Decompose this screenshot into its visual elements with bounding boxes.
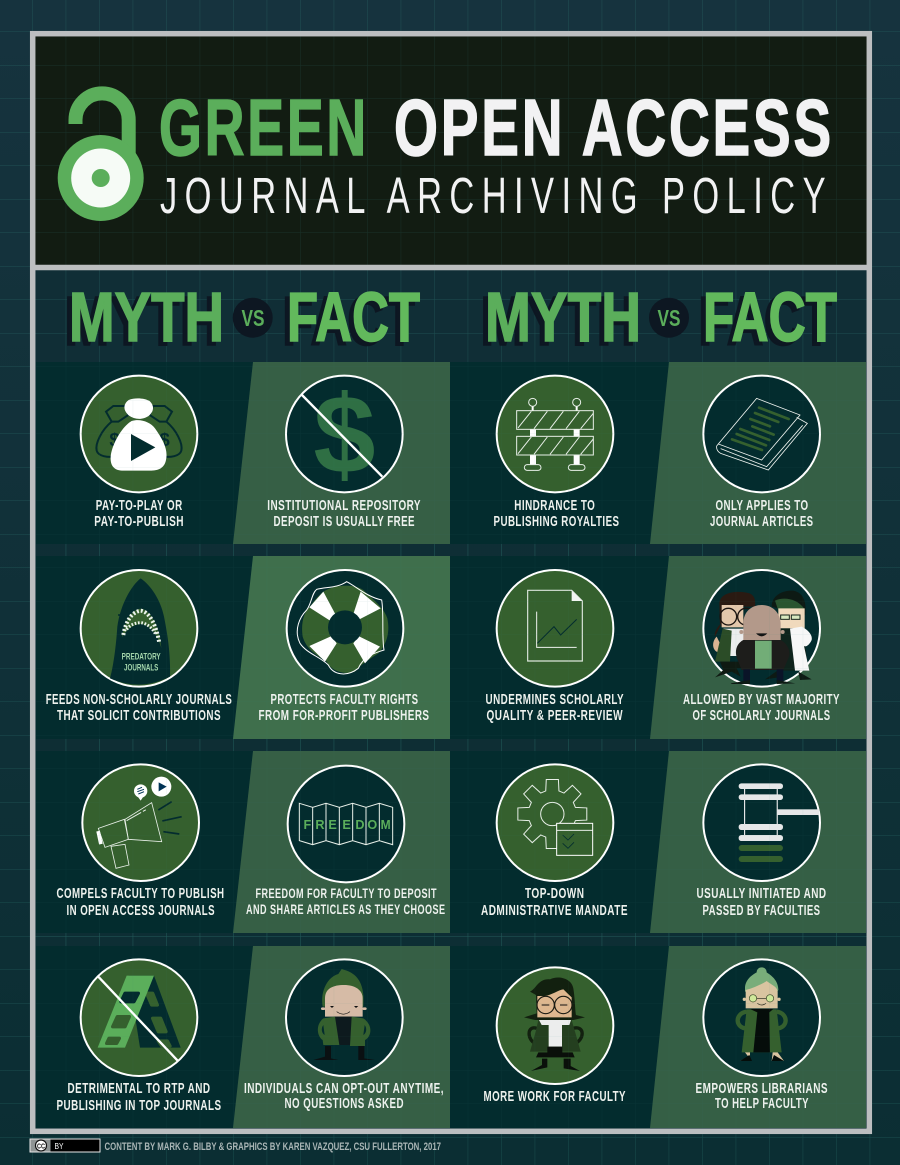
icon: shark predatory journals xyxy=(81,570,197,687)
caption: initiated by faculties: USUALLY INITIATED AND xyxy=(696,885,826,902)
icon: freedom folded map: M xyxy=(381,818,391,832)
header panel xyxy=(33,34,869,267)
caption: top-down mandate: ADMINISTRATIVE MANDATE xyxy=(481,902,628,919)
icon: document with chart xyxy=(497,570,613,687)
lower content background xyxy=(33,268,869,1131)
caption: undermines quality: UNDERMINES SCHOLARLY xyxy=(486,691,624,708)
panel: fact freedom xyxy=(233,751,450,933)
faint grid over panels xyxy=(36,362,866,1128)
panel: fact empowers librarians xyxy=(650,946,866,1128)
icon: freedom folded map: F xyxy=(303,818,311,832)
icon: road barricade xyxy=(497,376,613,492)
caption: compels faculty xyxy=(56,885,224,919)
panel: myth top-down mandate xyxy=(450,751,669,933)
right man xyxy=(765,591,812,680)
icon: freedom folded map xyxy=(288,766,404,882)
icon: gavel xyxy=(703,764,820,881)
heading: myth vs fact right xyxy=(480,278,837,360)
caption: protects rights xyxy=(258,691,430,724)
panel: fact repository free xyxy=(233,362,450,544)
caption: opt-out xyxy=(244,1080,444,1112)
caption: undermines quality: QUALITY & PEER-REVIEW xyxy=(486,707,623,724)
centre bald man xyxy=(731,605,795,684)
icon: gear and checklist window xyxy=(497,764,613,881)
footer: creative commons badge: CC xyxy=(37,1144,45,1150)
heading: myth vs fact right: MYTH xyxy=(485,278,641,356)
caption: pay-to-play: PAY-TO-PUBLISH xyxy=(94,513,184,530)
icon: crossed out ladder xyxy=(81,959,197,1076)
caption: pay-to-play: PAY-TO-PLAY OR xyxy=(96,497,183,514)
panel: fact journal articles xyxy=(650,362,866,544)
caption: journal articles: ONLY APPLIES TO xyxy=(716,497,808,514)
footer: creative commons badge: BY xyxy=(54,1142,64,1151)
caption: empowers librarians: TO HELP FACULTY xyxy=(715,1095,809,1112)
caption: pay-to-play xyxy=(94,497,184,530)
icon: journal book xyxy=(703,376,820,492)
caption: repository free: INSTITUTIONAL REPOSITORY xyxy=(267,497,421,514)
panel: myth detrimental to RTP xyxy=(36,946,253,1128)
caption: initiated by faculties: PASSED BY FACULTIES xyxy=(702,902,820,919)
icon: freedom folded map: E xyxy=(342,818,351,832)
caption: predatory journals xyxy=(46,691,232,724)
panel: myth predatory journals xyxy=(36,556,253,739)
footer: creative commons badge xyxy=(30,1139,100,1152)
caption: undermines quality xyxy=(486,691,624,724)
title: green open access: GREEN xyxy=(159,83,369,172)
heading: myth vs fact left: MYTH xyxy=(69,278,224,356)
heading: myth vs fact right: MYTH xyxy=(480,282,636,360)
panel: myth more work xyxy=(450,946,669,1128)
icon: woman with round glasses xyxy=(497,967,613,1084)
caption: detrimental to RTP: DETRIMENTAL TO RTP AND xyxy=(68,1080,210,1097)
caption: hindrance: HINDRANCE TO xyxy=(514,497,595,514)
heading: myth vs fact left: FACT xyxy=(282,282,415,360)
icon: crossed out dollar xyxy=(286,372,403,497)
caption: journal articles: JOURNAL ARTICLES xyxy=(710,513,814,530)
icon: megaphone xyxy=(82,764,199,881)
caption: compels faculty: COMPELS FACULTY TO PUBLISH xyxy=(56,885,224,902)
heading: myth vs fact right: FACT xyxy=(698,282,832,360)
caption: protects rights: FROM FOR-PROFIT PUBLISHERS xyxy=(258,707,430,724)
icon: money bags with play button: $ xyxy=(159,429,170,450)
caption: top-down mandate xyxy=(481,885,628,919)
heading: myth vs fact left: FACT xyxy=(287,278,420,356)
caption: top-down mandate: TOP-DOWN xyxy=(525,885,584,902)
icon: shark predatory journals: JOURNALS xyxy=(124,663,158,673)
caption: repository free: DEPOSIT IS USUALLY FREE xyxy=(274,513,415,530)
panel: fact protects rights xyxy=(233,556,450,739)
icon: money bags with play button: $ xyxy=(109,429,120,450)
panel: myth undermines quality xyxy=(450,556,669,739)
icon: crossed out dollar: $ xyxy=(313,372,375,497)
heading: myth vs fact left: MYTH xyxy=(64,282,219,360)
caption: opt-out: NO QUESTIONS ASKED xyxy=(284,1095,404,1112)
caption: empowers librarians xyxy=(696,1080,828,1112)
icon: librarian with bun xyxy=(703,959,820,1076)
caption: empowers librarians: EMPOWERS LIBRARIANS xyxy=(696,1080,828,1097)
icon: smiling faculty character xyxy=(286,959,403,1076)
caption: hindrance xyxy=(494,497,620,530)
icon: open access padlock xyxy=(58,93,144,221)
icon: three faculty characters xyxy=(703,570,820,687)
panel: myth hindrance xyxy=(450,362,669,544)
panel: fact allowed by journals xyxy=(650,556,866,739)
icon: shark predatory journals: PREDATORY xyxy=(122,651,161,661)
footer: credits: CONTENT BY MARK G. BILBY & GRAPHICS BY KAREN VAZQUEZ, CSU FULLERTON, 2017 xyxy=(104,1141,441,1153)
icon: freedom folded map: O xyxy=(367,818,377,832)
caption: journal articles xyxy=(710,497,814,530)
heading: myth vs fact right: VS xyxy=(658,305,680,331)
panel: myth pay-to-play xyxy=(36,362,253,544)
heading: myth vs fact left xyxy=(64,278,420,360)
panel: fact opt-out xyxy=(233,946,450,1128)
caption: protects rights: PROTECTS FACULTY RIGHTS xyxy=(270,691,418,708)
caption: allowed by journals xyxy=(683,691,840,724)
heading: myth vs fact right: FACT xyxy=(703,278,837,356)
caption: compels faculty: IN OPEN ACCESS JOURNALS xyxy=(66,902,215,919)
icon: freedom folded map: R xyxy=(315,818,325,832)
left woman xyxy=(713,592,755,677)
icon: life preserver xyxy=(287,570,403,687)
caption: predatory journals: THAT SOLICIT CONTRIBUTIONS xyxy=(57,707,221,724)
caption: detrimental to RTP xyxy=(56,1080,222,1114)
caption: hindrance: PUBLISHING ROYALTIES xyxy=(494,513,620,530)
panel: myth compels faculty xyxy=(36,751,253,933)
caption: predatory journals: FEEDS NON-SCHOLARLY JOURNALS xyxy=(46,691,232,708)
caption: detrimental to RTP: PUBLISHING IN TOP JOURNALS xyxy=(56,1097,222,1114)
icon: money bags with play button xyxy=(81,376,197,492)
icon: freedom folded map: E xyxy=(328,818,337,832)
caption: freedom: FREEDOM FOR FACULTY TO DEPOSIT xyxy=(256,885,437,901)
caption: repository free xyxy=(267,497,421,530)
title: green open access xyxy=(159,83,834,172)
caption: opt-out: INDIVIDUALS CAN OPT-OUT ANYTIME, xyxy=(244,1080,444,1097)
caption: freedom: AND SHARE ARTICLES AS THEY CHOOSE xyxy=(246,901,446,917)
caption: freedom xyxy=(246,885,446,917)
icon: freedom folded map: D xyxy=(355,818,365,832)
caption: initiated by faculties xyxy=(696,885,826,919)
caption: more work: MORE WORK FOR FACULTY xyxy=(484,1088,626,1105)
panel: fact initiated by faculties xyxy=(650,751,866,933)
heading: myth vs fact left: VS xyxy=(242,305,264,331)
